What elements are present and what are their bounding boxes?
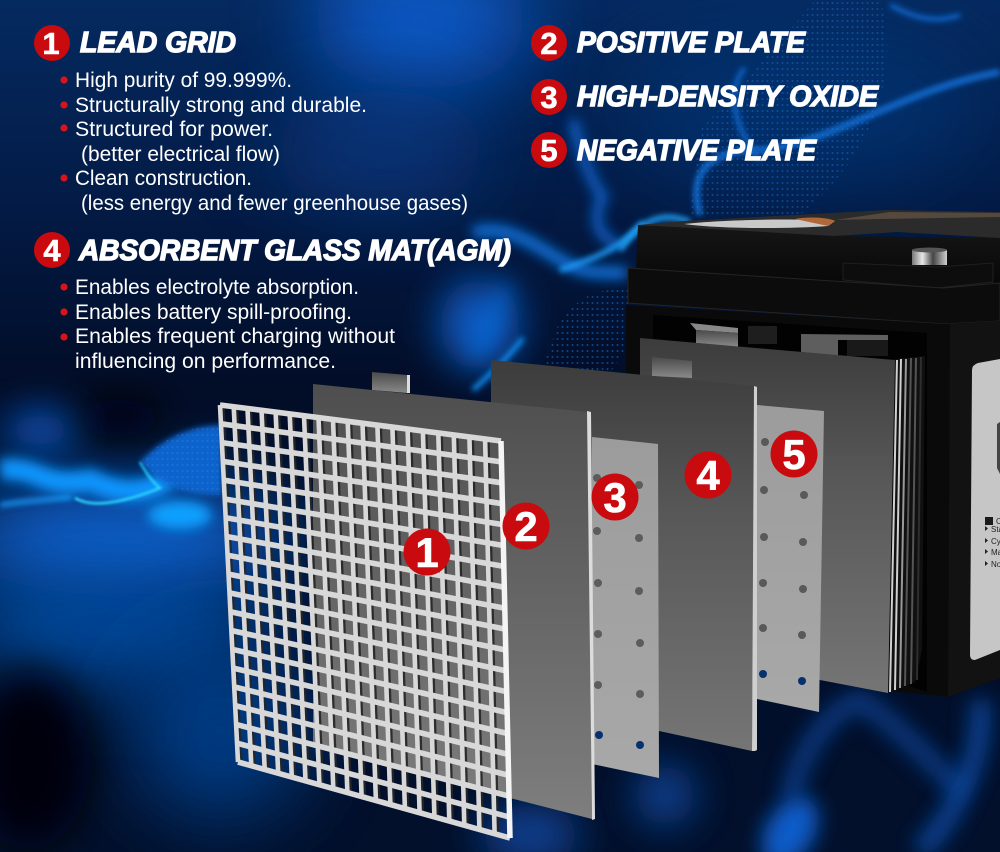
bullet list: absorbent glass mat: Enables frequent charging without — [75, 325, 395, 348]
bottom waves — [480, 805, 580, 852]
stack front plate — [640, 338, 895, 693]
marker 1 on grid: 1 — [415, 529, 439, 576]
upper right waves — [697, 72, 1000, 215]
marker 5 on negative plate — [770, 430, 818, 478]
stack: battery plate block — [640, 323, 925, 693]
stack small lug — [652, 357, 692, 378]
battery rim — [628, 268, 1000, 324]
section: lead grid — [34, 25, 468, 215]
heading: lead grid: 1 — [42, 26, 60, 61]
bullet list: lead grid: (less energy and fewer greenhouse gases) — [81, 192, 468, 215]
stack edge strips — [890, 356, 925, 693]
heading: lead grid: LEAD GRID — [80, 27, 236, 59]
bullet list: lead grid: Clean construction. — [75, 167, 252, 190]
left wave — [0, 469, 175, 491]
bullet list: absorbent glass mat: Enables battery spill-proofing. — [75, 301, 352, 324]
heading: high-density oxide: HIGH-DENSITY OXIDE — [577, 81, 880, 113]
marker 2 on positive plate: 2 — [514, 503, 538, 550]
plate: positive plate — [313, 372, 595, 820]
bullet list: lead grid — [60, 69, 468, 215]
plate: absorbent glass mat — [491, 360, 757, 751]
grid bars — [220, 405, 510, 838]
bullet list: lead grid: Structurally strong and durable. — [75, 94, 367, 117]
lead grid — [220, 405, 510, 838]
marker 3 on oxide: 3 — [603, 474, 627, 521]
battery body — [626, 305, 1000, 697]
heading: positive plate: 2 — [540, 26, 558, 61]
upper centre waves — [473, 231, 627, 273]
marker 5 on negative plate: 5 — [782, 431, 806, 478]
bullet list: absorbent glass mat: Enables electrolyte absorption. — [75, 276, 359, 299]
heading: positive plate: POSITIVE PLATE — [577, 27, 807, 59]
positive plate lug — [372, 372, 410, 393]
bullet list: lead grid: High purity of 99.999%. — [75, 69, 292, 92]
bullet list: lead grid: Structured for power. — [75, 118, 273, 141]
marker 2 on positive plate — [502, 502, 550, 550]
battery terminal — [912, 248, 947, 265]
battery casing — [626, 210, 1000, 697]
marker 4 on glass mat: 4 — [696, 452, 720, 499]
grid inner shadows — [223, 405, 498, 834]
bullet list: lead grid: (better electrical flow) — [81, 143, 280, 166]
battery lid front — [636, 225, 1000, 290]
bullet list: absorbent glass mat — [60, 276, 395, 373]
heading: lead grid — [34, 25, 236, 61]
plate: negative plate separator — [757, 405, 824, 712]
marker 1 on grid — [404, 528, 450, 576]
terminal ledge — [843, 263, 993, 288]
heading: high-density oxide: 3 — [540, 80, 558, 115]
battery lid top — [638, 210, 1000, 238]
stack terminal lugs — [690, 323, 738, 333]
heading: negative plate: 5 — [540, 133, 558, 168]
battery label — [970, 359, 1000, 660]
heading: negative plate: NEGATIVE PLATE — [577, 135, 818, 167]
bullet list: absorbent glass mat: influencing on performance. — [75, 350, 336, 373]
heading: absorbent glass mat: ABSORBENT GLASS MAT(AGM) — [78, 235, 511, 267]
marker 3 on oxide — [592, 474, 638, 521]
heading: absorbent glass mat: 4 — [43, 233, 61, 268]
marker 4 on glass mat — [684, 452, 732, 499]
section: absorbent glass mat — [34, 232, 511, 373]
plate: high-density oxide — [592, 437, 659, 778]
